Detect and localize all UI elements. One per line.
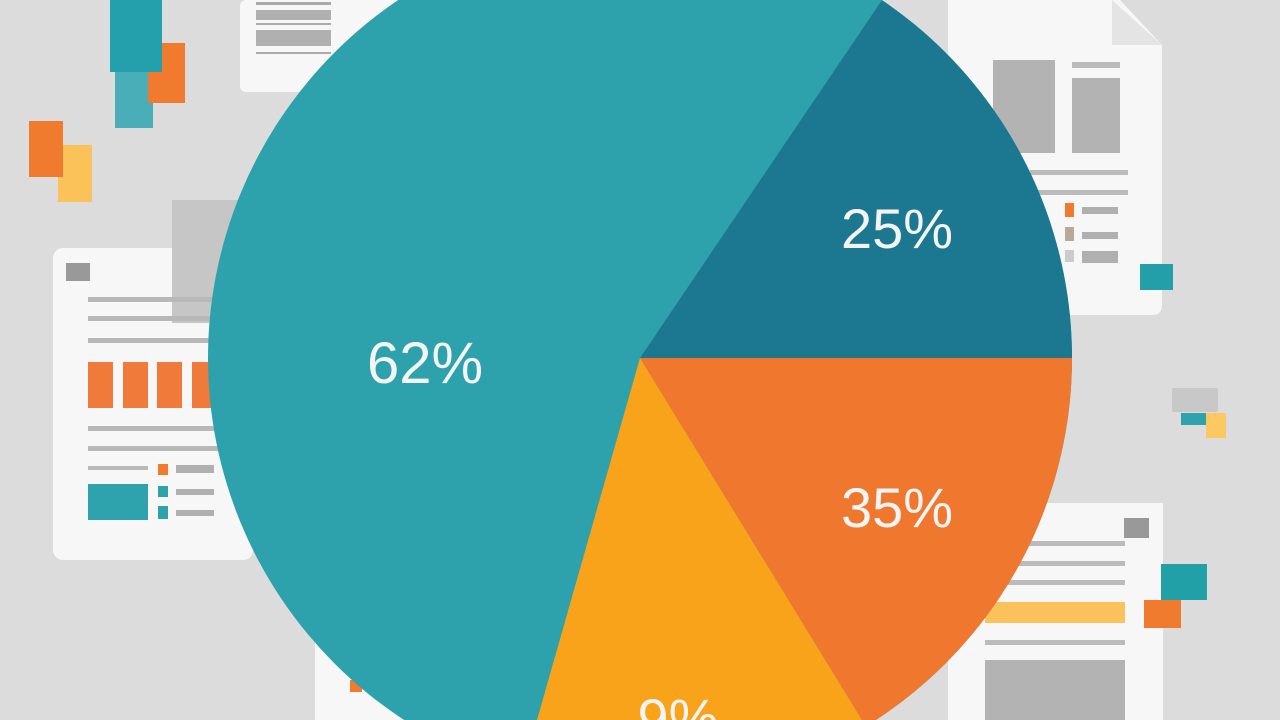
document: bottom center [315, 640, 545, 720]
slice: 25% dark blue [640, 0, 1100, 358]
label: 35%: 35% [841, 476, 953, 539]
document: bottom right [948, 503, 1163, 720]
slice: 9% yellow [537, 358, 862, 720]
document: top [240, 0, 410, 92]
icon: teal and orange blocks [1144, 564, 1207, 628]
icon: teal square [1140, 264, 1173, 290]
icon: small blocks middle right [1172, 388, 1226, 438]
label: 25%: 25% [841, 197, 953, 260]
decorative squares top-left [29, 0, 185, 202]
document: top right [948, 0, 1162, 315]
slice: 35% orange [640, 358, 1100, 720]
slice: 62% teal [208, 0, 1072, 720]
pie chart [208, 0, 1100, 720]
label: 62%: 62% [367, 331, 483, 396]
document: left report [53, 200, 253, 560]
